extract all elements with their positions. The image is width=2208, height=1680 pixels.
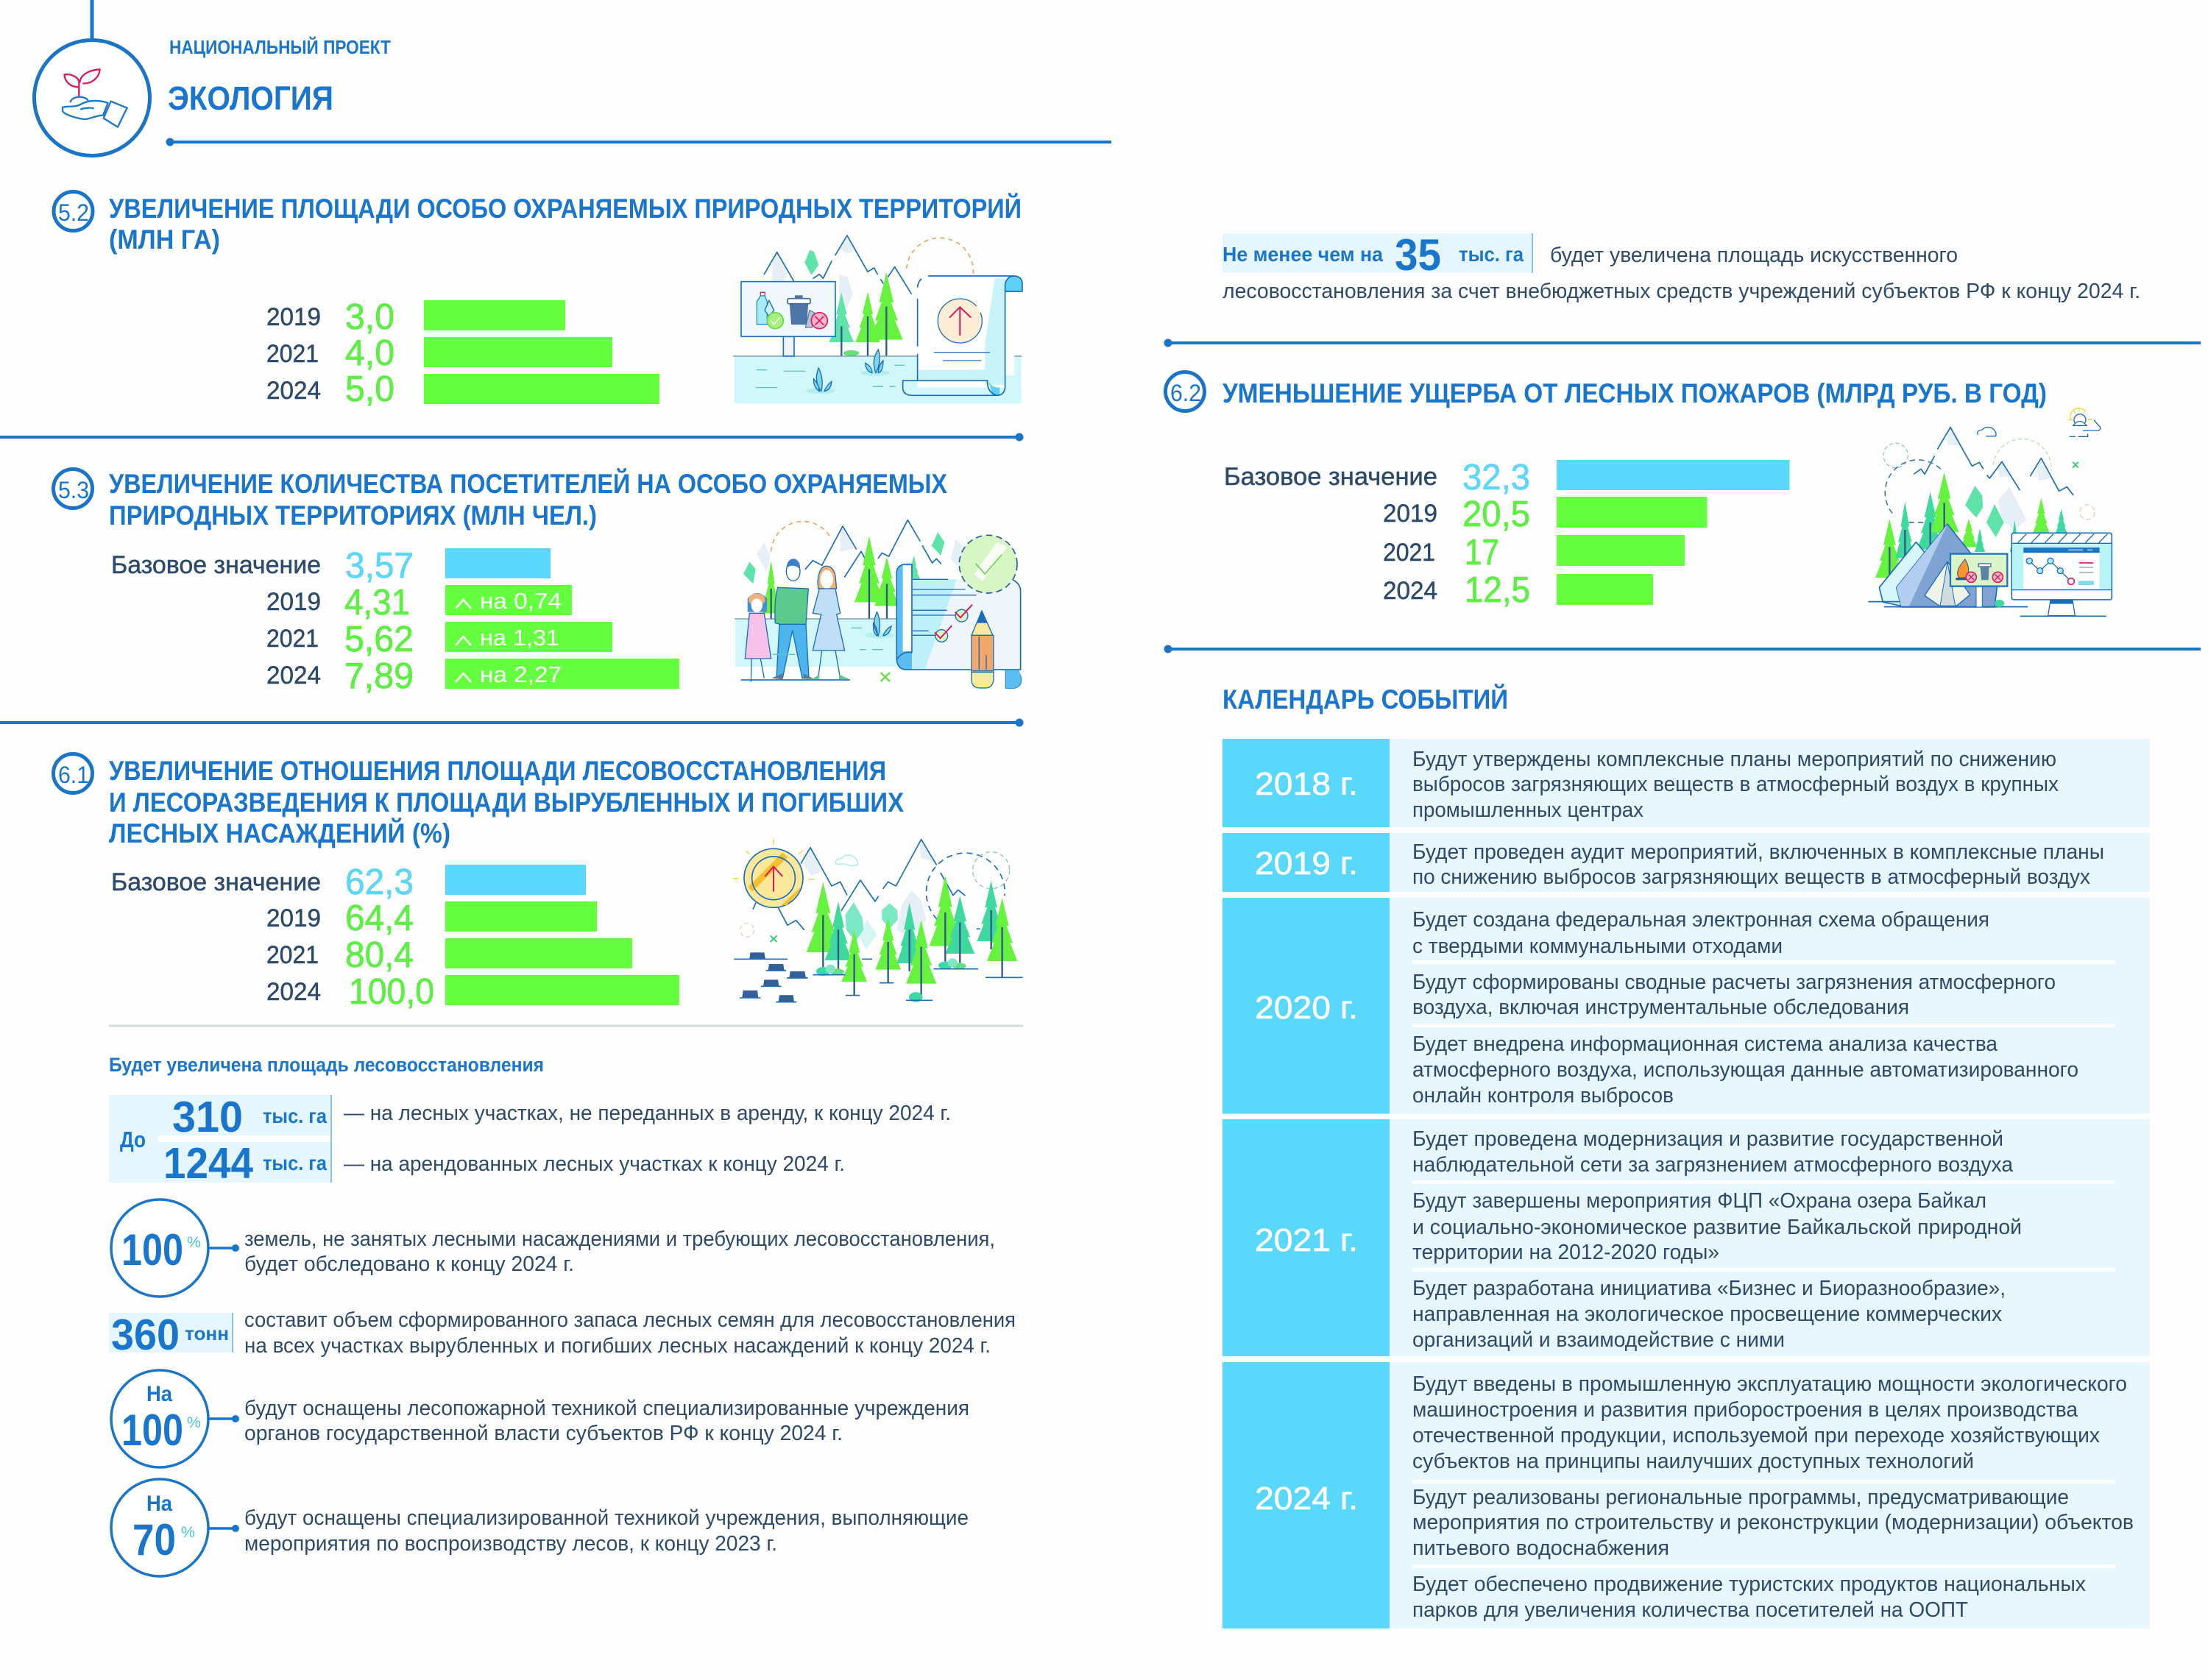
callout: 360 tons of seeds: тонн xyxy=(185,1324,229,1344)
bar chart 5.2: 2024 xyxy=(266,377,321,405)
row 2020: онлайн контроля выбросов xyxy=(1412,1084,1674,1107)
bar chart 6.2: 32,3 xyxy=(1462,458,1530,497)
callout: 35 thousand hectares: тыс. га xyxy=(1459,243,1524,266)
callout: 100% fire equipment: органов государственной власти субъектов РФ к концу 2024 г. xyxy=(244,1422,843,1445)
callout: 70% special equipment: 70 xyxy=(132,1515,176,1564)
row 2024: Будут реализованы региональные программы, предусматривающие xyxy=(1412,1486,2069,1509)
heading 5.2: УВЕЛИЧЕНИЕ ПЛОЩАДИ ОСОБО ОХРАНЯЕМЫХ ПРИРОДНЫХ ТЕРРИТОРИЙ xyxy=(109,193,1022,224)
row 2024: Будут введены в промышленную эксплуатацию мощности экологического xyxy=(1412,1372,2127,1396)
callout: 100% lands surveyed: земель, не занятых лесными насаждениями и требующих лесовосстановления, xyxy=(244,1227,995,1251)
row 2021: организаций и взаимодействие с ними xyxy=(1412,1328,1785,1352)
row 2018: 2018 г. xyxy=(1255,766,1358,802)
row 2020: Будет создана федеральная электронная схема обращения xyxy=(1412,908,1989,932)
heading 6.2: УМЕНЬШЕНИЕ УЩЕРБА ОТ ЛЕСНЫХ ПОЖАРОВ (МЛРД РУБ. В ГОД) xyxy=(1222,378,2047,408)
callout: 70% special equipment: На xyxy=(146,1492,172,1516)
man xyxy=(776,624,809,678)
callout: 100% lands surveyed: % xyxy=(187,1234,201,1251)
row 2020: Будет внедрена информационная система анализа качества xyxy=(1412,1032,1998,1056)
bar chart 5.2: 2021 xyxy=(266,340,319,368)
subtitle: НАЦИОНАЛЬНЫЙ ПРОЕКТ xyxy=(169,36,391,58)
heading 5.3: УВЕЛИЧЕНИЕ КОЛИЧЕСТВА ПОСЕТИТЕЛЕЙ НА ОСОБО ОХРАНЯЕМЫХ xyxy=(109,468,947,499)
title: ЭКОЛОГИЯ xyxy=(168,79,333,117)
divider xyxy=(0,718,1023,727)
divider xyxy=(0,433,1023,442)
illustration: camp, forest and monitor xyxy=(1868,407,2112,616)
row 2024: отечественной продукции, используемой при переходе хозяйствующих xyxy=(1412,1424,2100,1447)
woman xyxy=(818,566,837,589)
callout: 310 and 1244 thousand hectares xyxy=(109,1093,951,1188)
bar chart 6.2: 20,5 xyxy=(1462,495,1530,534)
heading 6.1: И ЛЕСОРАЗВЕДЕНИЯ К ПЛОЩАДИ ВЫРУБЛЕННЫХ И ПОГИБШИХ xyxy=(109,787,904,818)
row 2020 xyxy=(1222,898,2150,1114)
bar chart 5.3: на 2,27 xyxy=(480,662,562,687)
row 2024: 2024 г. xyxy=(1255,1481,1358,1517)
bar chart 6.2: 2019 xyxy=(1383,500,1437,528)
panel: calendar of events xyxy=(1222,684,2150,1628)
row 2019: 2019 г. xyxy=(1255,846,1358,882)
callout: 310 and 1244 thousand hectares: тыс. га xyxy=(263,1105,327,1127)
panel: 5.3 visitors xyxy=(53,468,1021,696)
divider xyxy=(1164,645,2201,653)
callout: 360 tons of seeds xyxy=(109,1308,1016,1359)
heading 5.3 xyxy=(109,468,947,531)
row 2020: воздуха, включая инструментальные обследования xyxy=(1412,996,1909,1019)
heading 6.1: ЛЕСНЫХ НАСАЖДЕНИЙ (%) xyxy=(109,818,450,848)
bar chart 6.2: 17 xyxy=(1465,533,1499,573)
bar chart 5.2: 4,0 xyxy=(345,333,394,373)
row 2021 xyxy=(1222,1119,2150,1356)
badge 5.3 xyxy=(53,469,93,508)
bar chart 5.3 xyxy=(111,546,679,696)
tent xyxy=(1879,542,1928,606)
callout: 310 and 1244 thousand hectares: 1244 xyxy=(163,1139,253,1188)
badge 6.1 xyxy=(53,754,93,793)
bar chart 6.1: 64,4 xyxy=(345,899,414,938)
row 2024: субъектов на принципы наилучших доступных технологий xyxy=(1412,1450,1974,1473)
heading 5.2 xyxy=(109,193,1022,255)
callout: 35 thousand hectares: 35 xyxy=(1395,230,1441,280)
row 2021: Будут завершены мероприятия ФЦП «Охрана озера Байкал xyxy=(1412,1189,1986,1213)
badge 5.3: 5.3 xyxy=(58,477,89,503)
row 2024 xyxy=(1222,1362,2150,1628)
badge 5.2 xyxy=(54,191,93,231)
callout: 100% fire equipment: 100 xyxy=(121,1406,183,1455)
row 2018 xyxy=(1222,739,2150,827)
icon: hand with sprout xyxy=(34,0,150,156)
callout: 360 tons of seeds: на всех участках вырубленных и погибших лесных насаждений к концу 2024 г. xyxy=(244,1334,991,1358)
callout: 100% fire equipment xyxy=(111,1370,969,1467)
bar chart 6.2: 12,5 xyxy=(1465,570,1530,610)
callout: 70% special equipment: будут оснащены специализированной техникой учреждения, выполняющие xyxy=(244,1506,969,1530)
panel: 6.2 forest fire damage xyxy=(1166,372,2112,616)
row 2020: Будут сформированы сводные расчеты загрязнения атмосферного xyxy=(1412,971,2056,994)
callout: 100% lands surveyed xyxy=(111,1199,995,1297)
bar chart 5.3: Базовое значение xyxy=(111,551,321,579)
callout: 70% special equipment xyxy=(111,1479,969,1576)
heading 6.1: УВЕЛИЧЕНИЕ ОТНОШЕНИЯ ПЛОЩАДИ ЛЕСОВОССТАНОВЛЕНИЯ xyxy=(109,756,886,786)
row 2021: Будет разработана инициатива «Бизнес и Биоразнообразие», xyxy=(1412,1277,2006,1300)
bar chart 6.1: 2021 xyxy=(266,941,319,969)
callout: 310 and 1244 thousand hectares: 310 xyxy=(172,1093,243,1141)
bar chart 5.3: на 0,74 xyxy=(480,588,562,614)
callout: 70% special equipment: % xyxy=(181,1524,195,1541)
callout: 70% special equipment: мероприятия по воспроизводству лесов, к концу 2023 г. xyxy=(244,1532,777,1556)
bar chart 5.3: 5,62 xyxy=(344,620,414,659)
medal xyxy=(733,839,815,879)
calendar heading: КАЛЕНДАРЬ СОБЫТИЙ xyxy=(1222,684,1508,715)
trees xyxy=(1875,519,1904,578)
bar chart 6.1: 2024 xyxy=(266,978,321,1006)
bar chart 5.2: 5,0 xyxy=(345,369,394,409)
row 2024: парков для увеличения количества посетителей на ООПТ xyxy=(1412,1598,1968,1622)
row 2018: Будут утверждены комплексные планы мероприятий по снижению xyxy=(1412,748,2056,771)
callout: 100% fire equipment: % xyxy=(187,1414,201,1431)
badge 6.1: 6.1 xyxy=(58,762,89,788)
bar chart 5.3: 7,89 xyxy=(344,656,414,696)
bar chart 6.2: Базовое значение xyxy=(1224,463,1437,491)
row 2018: выбросов загрязняющих веществ в атмосферный воздух в крупных xyxy=(1412,773,2059,796)
bar chart 5.2: 2019 xyxy=(266,303,321,331)
bar chart 6.1: 100,0 xyxy=(349,972,434,1012)
row 2021: и социально-экономическое развитие Байкальской природной xyxy=(1412,1216,2022,1239)
row 2021: территории на 2012-2020 годы» xyxy=(1412,1241,1719,1264)
gray divider xyxy=(109,1024,1023,1027)
bar chart 6.1 xyxy=(111,862,679,1012)
trees xyxy=(845,902,898,942)
sign xyxy=(1976,586,1982,607)
illustration: family and checklist xyxy=(735,520,1021,688)
bar chart 5.3: 3,57 xyxy=(345,546,414,586)
monitor xyxy=(2048,600,2075,616)
panel: 5.2 protected areas xyxy=(54,191,1022,409)
bar chart 5.3: на 1,31 xyxy=(480,625,559,651)
row 2021: направленная на экологическое просвещение коммерческих xyxy=(1412,1302,2002,1326)
child xyxy=(748,593,767,612)
bar chart 6.1: 80,4 xyxy=(345,935,414,975)
heading 5.2: (МЛН ГА) xyxy=(109,224,220,255)
header: national project xyxy=(34,0,1111,156)
callout: 310 and 1244 thousand hectares: До xyxy=(120,1127,146,1152)
callout: 360 tons of seeds: составит объем сформированного запаса лесных семян для лесовосстановления xyxy=(244,1308,1016,1332)
badge 5.2: 5.2 xyxy=(58,199,89,226)
stumps xyxy=(742,952,806,1002)
row 2019 xyxy=(1222,833,2150,892)
row 2021: Будет проведена модернизация и развитие государственной xyxy=(1412,1127,2003,1151)
heading 6.1 xyxy=(109,756,904,848)
row 2024: машиностроения и развития приборостроения в целях производства xyxy=(1412,1398,2078,1422)
callout: 360 tons of seeds: 360 xyxy=(111,1311,180,1359)
row 2024: мероприятия по строительству и реконструкции (модернизации) объектов xyxy=(1412,1511,2134,1534)
callout: 100% fire equipment: будут оснащены лесопожарной техникой специализированные учреждения xyxy=(244,1397,969,1420)
callout: 35 thousand hectares: лесовосстановления за счет внебюджетных средств учреждений субъектов РФ к концу 2024 г. xyxy=(1222,280,2140,303)
bar chart 6.1: Базовое значение xyxy=(111,868,321,896)
row 2020: 2020 г. xyxy=(1255,990,1358,1026)
bar chart 5.3: 2021 xyxy=(266,625,319,653)
bar chart 5.2 xyxy=(266,297,659,409)
bar chart 6.1: 2019 xyxy=(266,904,321,932)
bar chart 6.2: 2021 xyxy=(1383,539,1435,567)
heading 5.3: ПРИРОДНЫХ ТЕРРИТОРИЯХ (МЛН ЧЕЛ.) xyxy=(109,500,597,531)
callout: 310 and 1244 thousand hectares: — на лесных участках, не переданных в аренду, к концу 2024 г. xyxy=(344,1102,951,1125)
illustration: forest, stumps and medal xyxy=(733,839,1023,1002)
bar chart 5.3: 4,31 xyxy=(344,583,410,623)
callout: 35 thousand hectares: Не менее чем на xyxy=(1222,243,1383,266)
callout: 100% lands surveyed: будет обследовано к концу 2024 г. xyxy=(244,1252,574,1276)
callout: 310 and 1244 thousand hectares: тыс. га xyxy=(263,1152,327,1174)
panel: 6.1 reforestation xyxy=(53,754,1023,1576)
divider xyxy=(1164,339,2201,347)
pencil xyxy=(972,611,993,635)
bar chart 6.1: 62,3 xyxy=(345,862,414,902)
badge 6.2: 6.2 xyxy=(1170,380,1201,406)
illustration: billboard, forest and scroll xyxy=(733,235,1022,403)
row 2018: промышленных центрах xyxy=(1412,798,1643,822)
bar chart 6.2 xyxy=(1224,458,1790,610)
row 2020: с твердыми коммунальными отходами xyxy=(1412,935,1783,958)
bar chart 6.2: 2024 xyxy=(1383,577,1437,605)
badge 6.2 xyxy=(1166,372,1204,411)
bar chart 5.3: 2019 xyxy=(266,588,321,616)
row 2019: по снижению выбросов загрязняющих веществ в атмосферный воздух xyxy=(1412,865,2090,889)
scroll xyxy=(904,579,1021,670)
bar chart 5.2: 3,0 xyxy=(345,297,394,337)
callout: 35 thousand hectares xyxy=(1222,230,2140,303)
row 2021: 2021 г. xyxy=(1255,1222,1358,1258)
row 2019: Будет проведен аудит мероприятий, включенных в комплексные планы xyxy=(1412,840,2104,864)
callout: 310 and 1244 thousand hectares: — на арендованных лесных участках к концу 2024 г. xyxy=(344,1152,845,1176)
subheading: Будет увеличена площадь лесовосстановления xyxy=(109,1054,544,1076)
callout: 100% lands surveyed: 100 xyxy=(121,1225,183,1275)
callout: 100% fire equipment: На xyxy=(146,1382,172,1406)
row 2020: атмосферного воздуха, использующая данные автоматизированного xyxy=(1412,1058,2078,1082)
callout: 35 thousand hectares: будет увеличена площадь искусственного xyxy=(1550,244,1958,267)
bar chart 5.3: 2024 xyxy=(266,662,321,690)
row 2021: наблюдательной сети за загрязнением атмосферного воздуха xyxy=(1412,1153,2014,1177)
row 2024: питьевого водоснабжения xyxy=(1412,1537,1669,1560)
header rule xyxy=(166,138,1111,146)
row 2024: Будет обеспечено продвижение туристских продуктов национальных xyxy=(1412,1573,2086,1596)
